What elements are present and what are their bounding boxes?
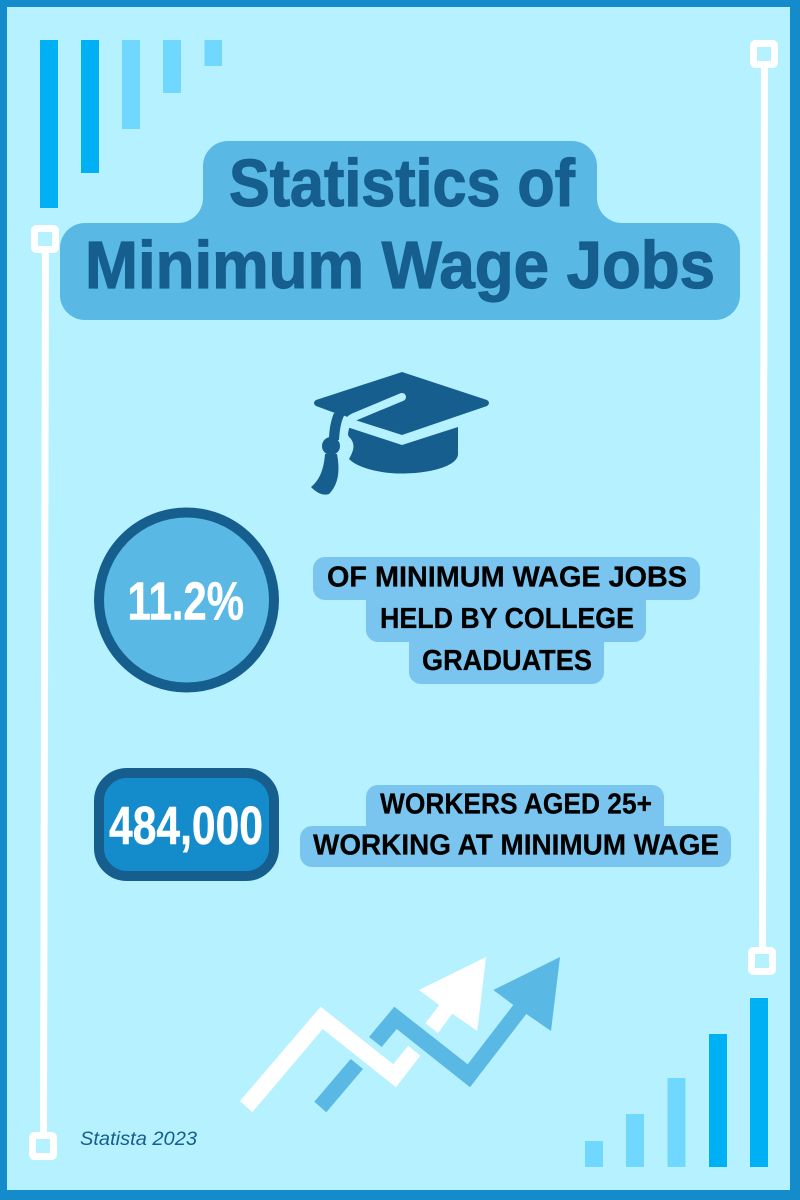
label: workers aged 25+ [300, 785, 731, 867]
label: college graduates [313, 557, 700, 684]
label: workers aged 25+: WORKING AT MINIMUM WAGE [313, 830, 719, 862]
arrow: white trend line [240, 957, 486, 1112]
left timeline line with square nodes [32, 228, 56, 1156]
title line 2: Minimum Wage Jobs [85, 228, 715, 303]
bars: bottom right decoration [585, 998, 768, 1167]
icon: graduation cap [311, 372, 489, 495]
label: college graduates: HELD BY COLLEGE [380, 603, 634, 635]
stat value: 484,000 [109, 796, 263, 856]
label: workers aged 25+: WORKERS AGED 25+ [380, 788, 652, 820]
stat badge: 484,000 [99, 773, 274, 876]
title line 1: Statistics of [229, 146, 576, 221]
bars: top left decoration [40, 40, 222, 208]
right timeline line with square nodes [752, 44, 774, 972]
arrow: blue trend line [314, 957, 560, 1112]
stat circle: 11.2% [99, 512, 274, 688]
label: college graduates: GRADUATES [422, 645, 592, 677]
stat value: 11.2% [128, 572, 244, 632]
source note: Statista 2023 [80, 1129, 197, 1150]
title banner [60, 141, 740, 320]
label: college graduates: OF MINIMUM WAGE JOBS [327, 562, 687, 594]
